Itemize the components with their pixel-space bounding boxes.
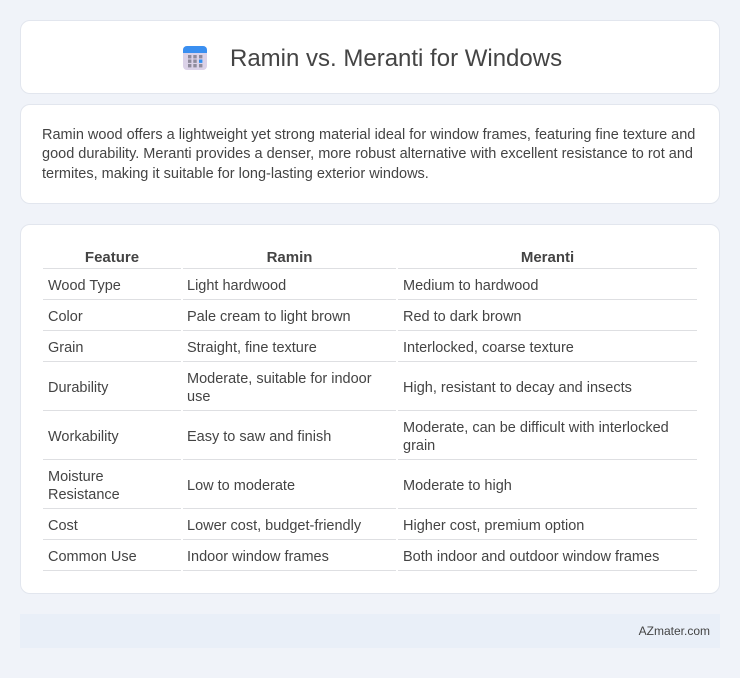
panel: title card bbox=[20, 20, 720, 94]
panel: comparison table bbox=[20, 224, 720, 594]
cell: Meranti common use: Both indoor and outdoor window frames bbox=[403, 549, 659, 565]
cell: Ramin common use: Indoor window frames bbox=[187, 549, 329, 565]
cell: Ramin durability: Moderate, suitable for indoor bbox=[187, 371, 372, 387]
footer bar bbox=[20, 614, 720, 648]
cell: Meranti color: Red to dark brown bbox=[403, 309, 521, 325]
row: Color: Color bbox=[48, 309, 83, 325]
cell: Ramin wood type: Light hardwood bbox=[187, 278, 286, 294]
cell: Meranti workability: Moderate, can be difficult with interlocked bbox=[403, 420, 669, 436]
cell: Ramin grain: Straight, fine texture bbox=[187, 340, 317, 356]
icon: calendar bbox=[183, 46, 207, 70]
cell: Meranti grain: Interlocked, coarse texture bbox=[403, 340, 574, 356]
text block: description bbox=[42, 127, 695, 182]
row: Moisture Resistance: Resistance bbox=[48, 487, 120, 503]
row: Grain: Grain bbox=[48, 340, 83, 356]
table header: Feature: Feature bbox=[85, 249, 139, 266]
table header: Ramin: Ramin bbox=[267, 249, 312, 266]
table header: Meranti: Meranti bbox=[521, 249, 574, 266]
cell: Ramin durability bbox=[187, 371, 372, 405]
cell: Meranti workability: grain bbox=[403, 438, 435, 454]
cell: Ramin cost: Lower cost, budget-friendly bbox=[187, 518, 361, 534]
cell: Ramin workability: Easy to saw and finish bbox=[187, 429, 331, 445]
row: Moisture Resistance bbox=[48, 469, 120, 503]
text block: description: Ramin wood offers a lightweight yet strong material ideal for window frames, featuring fine texture and bbox=[42, 127, 695, 143]
panel: description bbox=[20, 104, 720, 204]
row: Common Use: Common Use bbox=[48, 549, 137, 565]
cell: Meranti moisture resistance: Moderate to high bbox=[403, 478, 512, 494]
text block: description: good durability. Meranti provides a denser, more robust alternative with excellent resistance to rot and bbox=[42, 146, 693, 162]
title: Ramin vs. Meranti for Windows bbox=[230, 45, 562, 72]
cell: Ramin moisture resistance: Low to moderate bbox=[187, 478, 295, 494]
row: Cost: Cost bbox=[48, 518, 78, 534]
cell: Meranti wood type: Medium to hardwood bbox=[403, 278, 538, 294]
cell: Meranti workability bbox=[403, 420, 669, 454]
footer text: source: AZmater.com bbox=[639, 624, 710, 638]
row: Durability: Durability bbox=[48, 380, 108, 396]
row: Workability: Workability bbox=[48, 429, 119, 445]
cell: Meranti cost: Higher cost, premium option bbox=[403, 518, 584, 534]
row: Wood Type: Wood Type bbox=[48, 278, 121, 294]
cell: Ramin color: Pale cream to light brown bbox=[187, 309, 351, 325]
text block: description: termites, making it suitable for long-lasting exterior windows. bbox=[42, 166, 429, 182]
row: Moisture Resistance: Moisture bbox=[48, 469, 104, 485]
cell: Ramin durability: use bbox=[187, 389, 210, 405]
cell: Meranti durability: High, resistant to decay and insects bbox=[403, 380, 632, 396]
